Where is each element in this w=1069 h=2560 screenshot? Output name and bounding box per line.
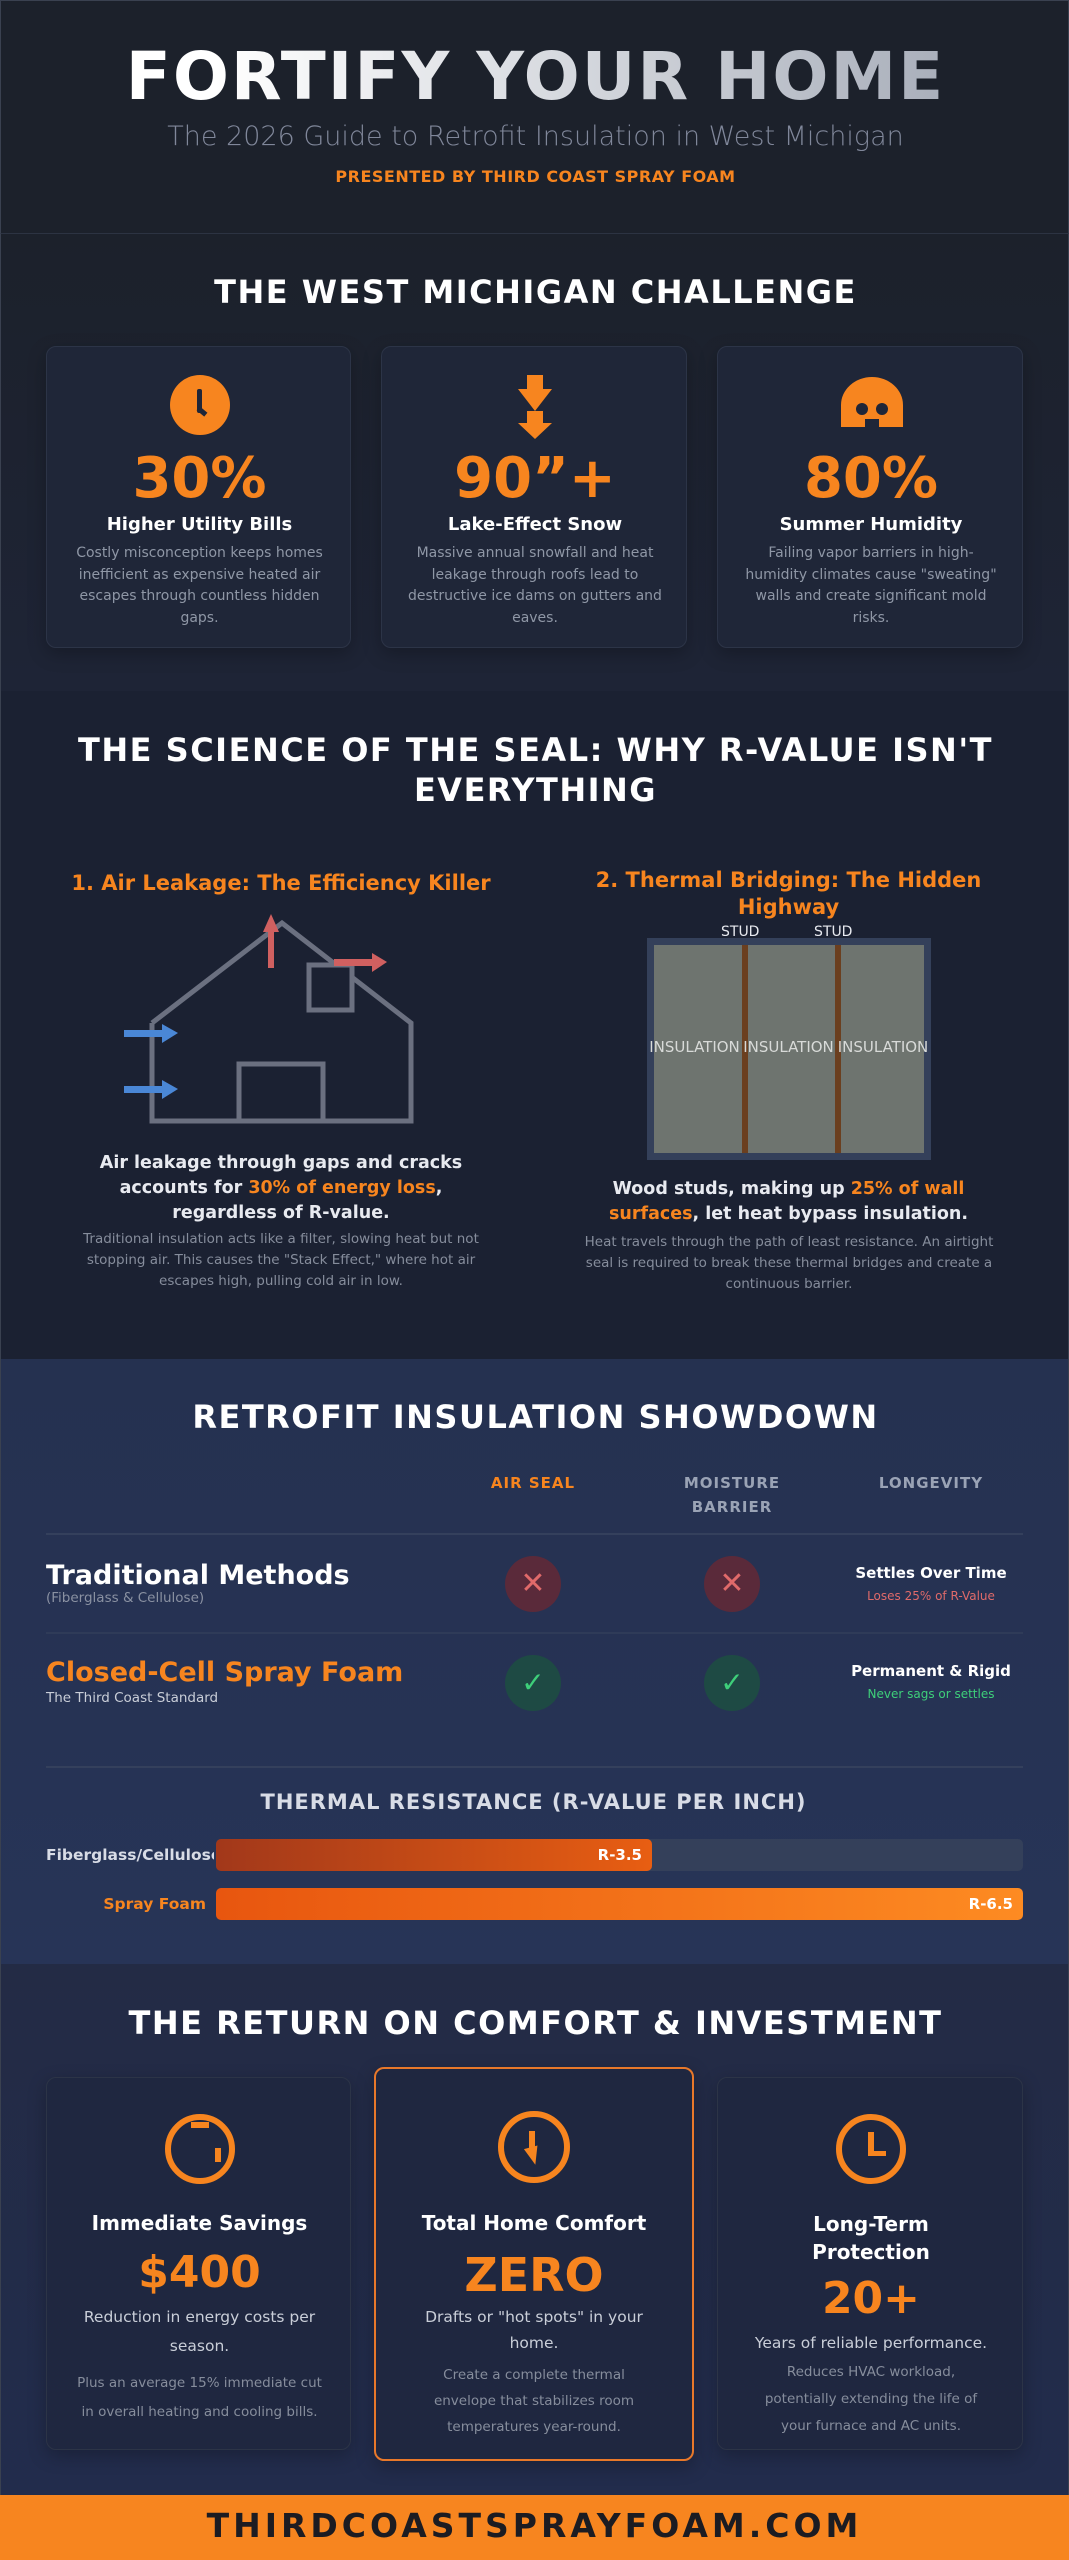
- label: studs: [721, 924, 852, 940]
- section: return on investment: [0, 1964, 1069, 2495]
- card: long-term: [717, 2077, 1023, 2450]
- card: snow: [381, 346, 687, 648]
- text: air leakage bold: Air leakage through gaps and cracks accounts for 30% of energy loss, regardless of R-value.: [100, 1153, 462, 1223]
- card: savings: Plus an average 15% immediate cut in overall heating and cooling bills.: [77, 2375, 322, 2420]
- row: spray foam: The Third Coast Standard: [46, 1690, 218, 1706]
- row: spray foam: Never sags or settles: [868, 1687, 994, 1701]
- column headers: AIR SEAL: [491, 1474, 575, 1492]
- presented by: PRESENTED BY THIRD COAST SPRAY FOAM: [335, 167, 736, 186]
- icon: check: ✓: [720, 1666, 744, 1699]
- card: long-term: Long-Term Protection: [812, 2212, 930, 2264]
- chart: r-value bars: Spray Foam: [103, 1895, 206, 1913]
- stat: 30%: [132, 446, 267, 511]
- footer: THIRDCOASTSPRAYFOAM.COM: [207, 2506, 862, 2545]
- heading: RETROFIT INSULATION SHOWDOWN: [192, 1398, 879, 1436]
- stat: 90”+: [454, 446, 616, 511]
- table: comparison: LONGEVITY: [879, 1474, 983, 1492]
- row: spray foam: Closed-Cell Spray Foam: [46, 1657, 403, 1688]
- row: spray foam: [46, 1655, 1011, 1711]
- header: [0, 0, 1069, 234]
- card: comfort: Create a complete thermal envelope that stabilizes room temperatures year-round.: [434, 2367, 634, 2435]
- heading: THE SCIENCE OF THE SEAL: WHY R-VALUE ISN'T EVERYTHING: [78, 731, 993, 809]
- label: Higher Utility Bills: [107, 514, 292, 535]
- description: Failing vapor barriers in high-humidity climates cause "sweating" walls and create significant mold risks.: [745, 545, 997, 626]
- stat: 80%: [804, 446, 938, 511]
- section: west michigan challenge: [0, 234, 1069, 691]
- label: Summer Humidity: [780, 514, 962, 535]
- subheading: air leakage: 1. Air Leakage: The Efficiency Killer: [71, 871, 491, 895]
- card: comfort: ZERO: [464, 2248, 604, 2302]
- row: traditional: Loses 25% of R-Value: [867, 1589, 995, 1603]
- card: comfort: [374, 2067, 694, 2461]
- label: Lake-Effect Snow: [448, 514, 622, 535]
- chart: r-value bars: R-3.5: [598, 1846, 642, 1864]
- table: comparison: MOISTURE BARRIER: [684, 1474, 780, 1516]
- table: comparison: [46, 1474, 1023, 1711]
- card: comfort: Drafts or "hot spots" in your home.: [425, 2308, 643, 2352]
- icon: cross: ✕: [520, 1566, 546, 1601]
- row: traditional: [46, 1556, 1007, 1612]
- icon: check: [505, 1655, 561, 1711]
- icon: dome: [841, 377, 903, 427]
- card: savings: Immediate Savings: [92, 2211, 307, 2235]
- icon: thermometer circle: [170, 375, 230, 435]
- icon: check: [704, 1655, 760, 1711]
- diagram: wall studs: INSULATION: [743, 1038, 834, 1056]
- icon: clock: [836, 2114, 906, 2184]
- card: long-term: Years of reliable performance.: [755, 2334, 987, 2352]
- chart: r-value bars: [46, 1790, 1023, 1920]
- text: air leakage detail: Traditional insulation acts like a filter, slowing heat but not stopping air. This causes the "Stack Effect," where hot air escapes high, pulling cold air in low.: [83, 1231, 479, 1289]
- diagram: wall studs: INSULATION: [649, 1038, 740, 1056]
- section: science of the seal: [0, 691, 1069, 1359]
- icon: cross: ✕: [719, 1566, 745, 1601]
- card: savings: $400: [138, 2247, 261, 2298]
- card: long-term: 20+: [822, 2273, 920, 2324]
- row: spray foam: Permanent & Rigid: [851, 1662, 1011, 1680]
- title: FORTIFY YOUR HOME: [126, 38, 945, 115]
- icon: gauge: [165, 2114, 235, 2184]
- footer: [0, 2495, 1069, 2560]
- subtitle: The 2026 Guide to Retrofit Insulation in West Michigan: [167, 121, 904, 152]
- label: studs: STUD: [814, 924, 852, 940]
- row: traditional: Settles Over Time: [855, 1564, 1007, 1582]
- card: comfort: Total Home Comfort: [422, 2211, 646, 2235]
- icon: thermostat: [498, 2111, 570, 2183]
- heading: THE WEST MICHIGAN CHALLENGE: [214, 273, 857, 311]
- text: thermal bold: Wood studs, making up 25% of wall surfaces, let heat bypass insulation.: [609, 1179, 968, 1224]
- card: long-term: Reduces HVAC workload, potentially extending the life of your furnace and AC units.: [765, 2364, 977, 2434]
- row: traditional: Traditional Methods: [46, 1560, 350, 1591]
- card: savings: [46, 2077, 351, 2450]
- text: thermal detail: Heat travels through the path of least resistance. An airtight seal is required to break these thermal bridges and create a continuous barrier.: [585, 1234, 993, 1292]
- icon: check: ✓: [521, 1666, 545, 1699]
- description: Costly misconception keeps homes inefficient as expensive heated air escapes through countless hidden gaps.: [76, 545, 323, 626]
- subheading: thermal bridging: 2. Thermal Bridging: The Hidden Highway: [596, 868, 981, 919]
- card: savings: Reduction in energy costs per season.: [84, 2308, 315, 2355]
- card: humidity: [717, 346, 1023, 648]
- chart: r-value bars: R-6.5: [969, 1895, 1013, 1913]
- chart: r-value bars: THERMAL RESISTANCE (R-VALUE PER INCH): [260, 1790, 806, 1814]
- icon: cross: [505, 1556, 561, 1612]
- row: traditional: (Fiberglass & Cellulose): [46, 1590, 204, 1606]
- heading: THE RETURN ON COMFORT & INVESTMENT: [129, 2004, 942, 2042]
- diagram: wall studs: [647, 938, 931, 1160]
- icon: snow arrows: [518, 375, 552, 439]
- icon: cross: [704, 1556, 760, 1612]
- label: studs: STUD: [721, 924, 759, 940]
- diagram: wall studs: INSULATION: [838, 1038, 928, 1056]
- card: utility bills: [46, 346, 351, 648]
- section: showdown: [0, 1359, 1069, 1964]
- description: Massive annual snowfall and heat leakage through roofs lead to destructive ice dams on gutters and eaves.: [408, 545, 662, 626]
- diagram: house with air arrows: [124, 914, 414, 1124]
